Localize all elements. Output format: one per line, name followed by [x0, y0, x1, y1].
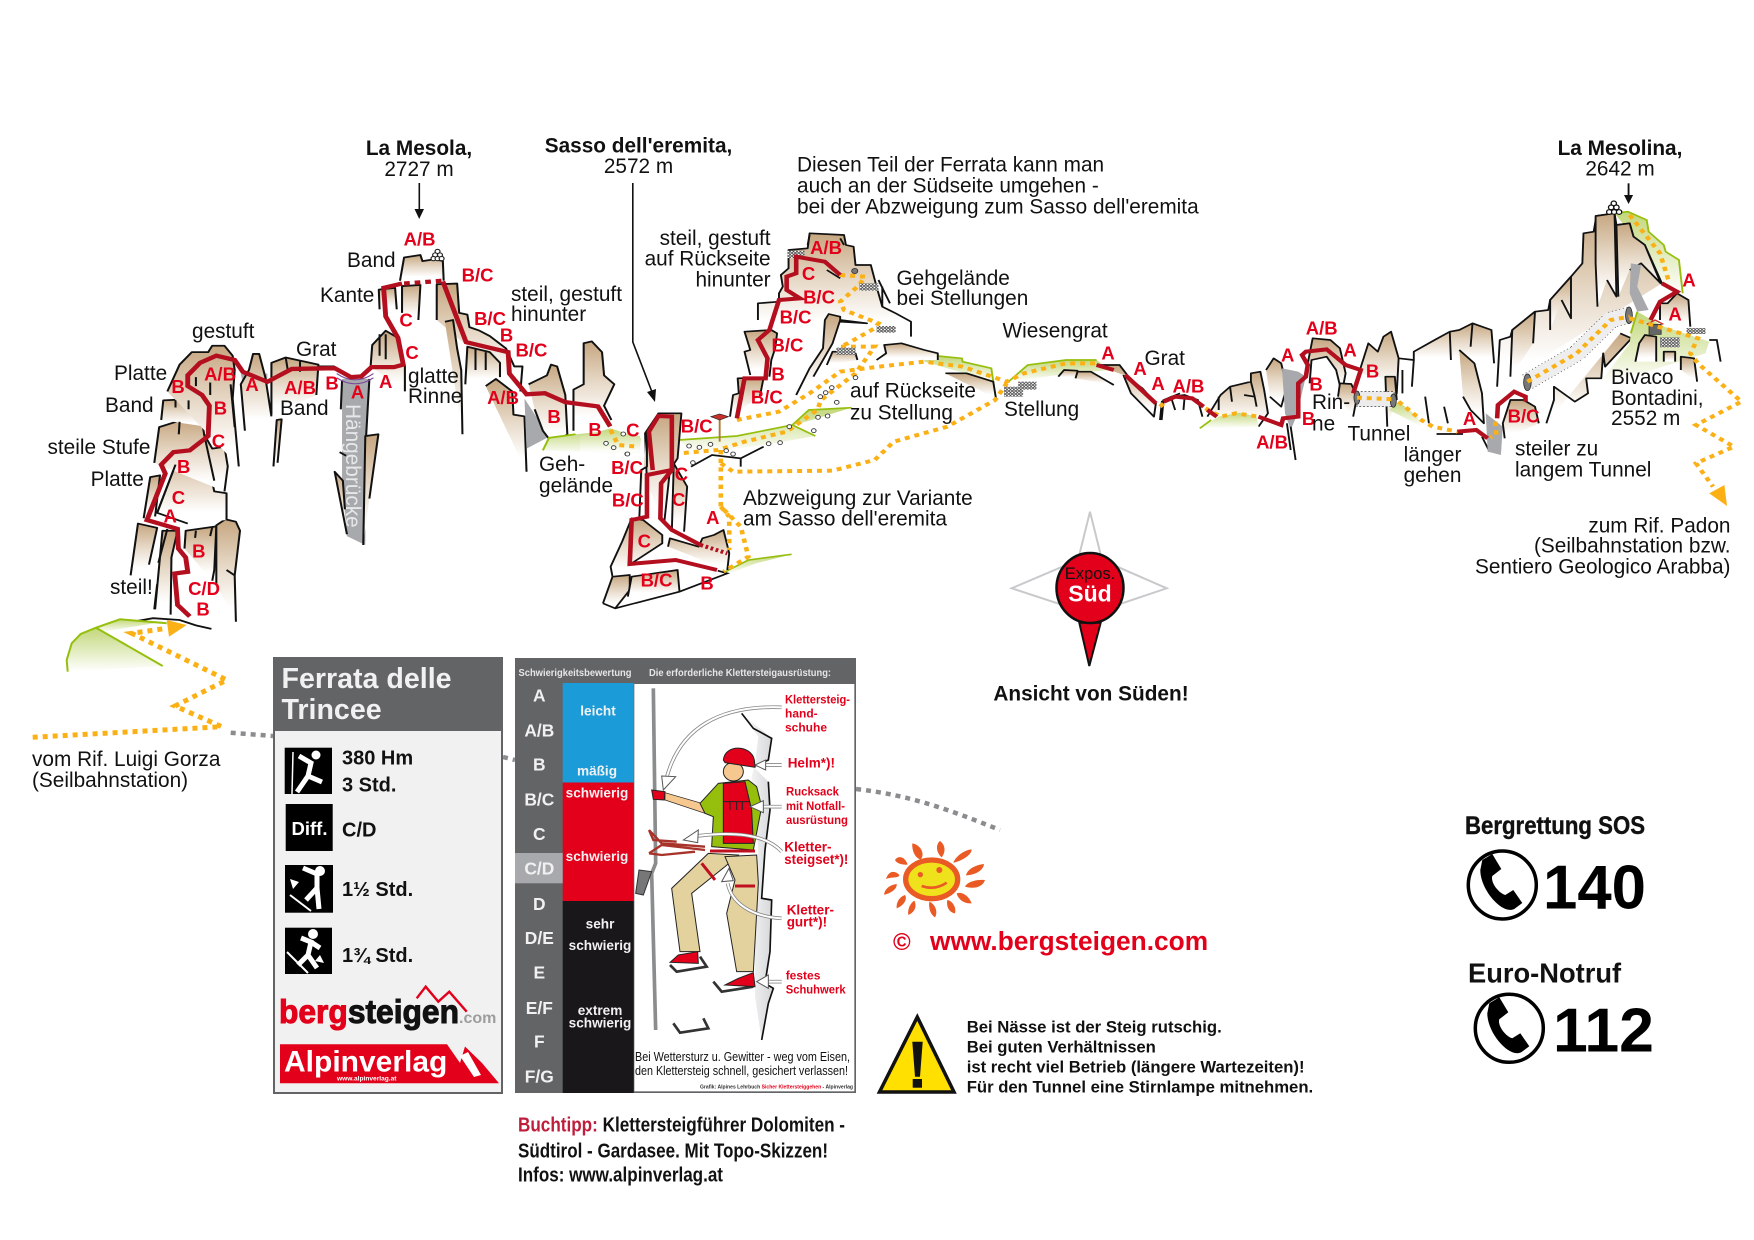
iron cable — [652, 688, 656, 1030]
grade labels along the route: B — [1302, 408, 1315, 429]
summit label: La Mesolina: 2642 m — [1585, 158, 1655, 181]
terrain notes, centre: Stellung — [1004, 398, 1079, 421]
weather warning note: den Klettersteig schnell, gesichert verlassen! — [635, 1064, 848, 1078]
title — [282, 663, 452, 726]
grade labels along the route: C — [672, 489, 685, 510]
grade labels along the route: B/C — [780, 306, 811, 327]
ascent time: 1½ Std. — [342, 879, 413, 901]
grade labels along the route: B — [700, 572, 714, 593]
grade letters: C/D — [524, 858, 554, 878]
descent time: 1¾ Std. — [342, 945, 413, 967]
panel header texts — [518, 668, 831, 679]
height and time — [342, 747, 413, 797]
emergency: Euro-Notruf: Euro-Notruf — [1468, 958, 1622, 989]
grade labels along the route: A — [379, 371, 392, 392]
terrain notes, left: Platte — [91, 468, 144, 491]
grade labels along the route: B/C — [803, 286, 835, 307]
grade labels along the route: A — [351, 382, 364, 403]
terrain notes, centre: auch an der Südseite umgehen - — [797, 175, 1099, 198]
grade letters: D/E — [525, 928, 554, 948]
grade labels along the route: B/C — [641, 570, 672, 591]
summit label: La Mesola: 2727 m — [384, 158, 454, 181]
pointer arrows — [662, 707, 782, 988]
grade labels along the route: B/C — [1508, 406, 1540, 427]
arrowhead to Rif. Padon — [1709, 485, 1727, 506]
grade labels along the route: B — [588, 419, 602, 440]
grade labels along the route: A — [1101, 342, 1115, 363]
grade labels along the route: A/B — [404, 229, 436, 250]
summit label: Sasso dell'eremita: Sasso dell'eremita, — [545, 135, 732, 158]
Sasso tower rocks — [603, 413, 729, 608]
cliff edge — [742, 713, 773, 1040]
equipment labels — [784, 692, 850, 996]
illustration credit: Grafik: Alpines Lehrbuch Sicher Klettersteiggehen - Alpinverlag — [700, 1085, 853, 1091]
tunnel long — [1524, 307, 1632, 391]
grade labels along the route: C — [212, 430, 225, 452]
route dashed summit traverse — [404, 281, 443, 284]
stone markers around bivouac — [1660, 328, 1705, 347]
central section of the topo: Sasso dell'eremita to Wiesengrat — [580, 233, 1180, 608]
terrain notes, left: Kante — [320, 284, 374, 307]
access note: vom Rif. Luigi Gorza — [32, 748, 221, 771]
rock group before scree meadow — [524, 341, 614, 449]
exit note: Sentiero Geologico Arabba) — [1475, 555, 1730, 578]
start meadow and arrival path — [33, 619, 227, 737]
gray gully below tunnel — [1486, 413, 1503, 455]
grade labels along the route: A/B — [1172, 376, 1204, 397]
bar labels: schwierig — [569, 1015, 631, 1030]
rungs — [670, 957, 753, 1033]
equipment labels: Kletter- — [784, 840, 832, 855]
icon: difficulty: Diff. — [292, 818, 327, 839]
terrain notes, right: Bivaco — [1611, 366, 1673, 389]
grade labels along the route: B/C — [474, 308, 506, 329]
grade labels along the route: A/B — [810, 237, 842, 258]
rocks around the bivouac — [1635, 293, 1721, 382]
icon: La Mesolina cairn — [1607, 201, 1622, 214]
cliff — [742, 713, 773, 1040]
La Mesolina massif rocks — [1497, 213, 1662, 438]
bar labels: sehr — [586, 917, 615, 932]
equipment illustration — [634, 684, 854, 1091]
grade labels along the route: B — [177, 456, 190, 477]
terrain notes, right: ne — [1312, 413, 1335, 436]
emergency: Bergrettung: 140 — [1543, 853, 1646, 922]
head and helmet — [723, 762, 743, 781]
website copyright: www.bergsteigen.com — [929, 926, 1208, 956]
icon: sun logo — [884, 841, 985, 917]
topo annotations — [32, 135, 1730, 792]
grade labels along the route: A — [1682, 270, 1696, 291]
grade labels along the route: A — [1151, 373, 1165, 394]
terrain notes, right — [1312, 366, 1704, 487]
ridge rocks between tower and bridge — [241, 354, 335, 466]
lower tower rocks — [131, 519, 240, 622]
terrain notes, left: Band — [105, 394, 154, 417]
grade labels along the route: C — [802, 263, 815, 284]
grade labels along the route: B/C — [681, 416, 713, 437]
access note: (Seilbahnstation) — [32, 769, 188, 792]
exit note — [1475, 514, 1730, 578]
compass exposure marker: Expos. — [1065, 565, 1115, 583]
icon: difficulty — [286, 804, 333, 851]
emergency: Euro-Notruf: 112 — [1553, 997, 1654, 1066]
grade labels along the route: B — [1366, 360, 1379, 381]
terrain notes, centre: bei Stellungen — [896, 287, 1028, 310]
warning text — [967, 1017, 1313, 1096]
grade labels along the route: B — [196, 599, 210, 620]
grade labels along the route: B — [325, 373, 339, 394]
carabiner — [636, 870, 652, 895]
bar labels: mäßig — [577, 764, 617, 779]
equipment labels: festes — [786, 968, 821, 982]
trail dots (yellow) — [611, 275, 1097, 572]
equipment labels: gurt*)! — [787, 915, 827, 930]
warning text: Bei Nässe ist der Steig rutschig. — [967, 1017, 1222, 1036]
highlight C/D grade — [515, 853, 563, 883]
La Mesola summit rocks — [371, 255, 527, 472]
warning text: Für den Tunnel eine Stirnlampe mitnehmen. — [967, 1077, 1313, 1096]
backpack — [723, 782, 753, 843]
grade labels along the route: A — [1343, 340, 1357, 361]
red route: tower loop — [630, 416, 717, 570]
bar labels: schwierig — [569, 938, 631, 953]
terrain notes, left: steil! — [110, 576, 153, 599]
terrain notes, right: 2552 m — [1611, 407, 1680, 430]
ridge rocks — [1200, 323, 1494, 460]
emergency: Bergrettung — [1465, 812, 1646, 922]
book tip: Südtirol - Gardasee. Mit Topo-Skizzen! — [518, 1140, 828, 1162]
terrain notes, left: Geh- — [539, 453, 585, 476]
grade labels along the route: A/B — [487, 387, 519, 408]
red route: Grat segments — [1097, 365, 1156, 403]
grade labels along the route: A/B — [1306, 317, 1338, 338]
panel: route summary — [273, 658, 503, 1093]
equipment labels: ausrüstung — [786, 813, 848, 827]
grade letters: E — [533, 962, 545, 982]
icon: bivouac hut — [1647, 320, 1663, 334]
arrow to La Mesolina — [1624, 183, 1633, 204]
emergency: Bergrettung: Bergrettung SOS — [1465, 812, 1645, 840]
terrain notes, left: Band — [347, 249, 396, 272]
grade labels along the route: C — [399, 309, 413, 330]
icon: phone — [1475, 994, 1543, 1062]
equipment labels: Helm*)! — [788, 755, 835, 770]
logo: bergsteigen.com: .com — [459, 1010, 496, 1027]
terrain notes, left: Platte — [114, 362, 167, 385]
weather warning note: Bei Wettersturz u. Gewitter - weg vom Eisen, — [635, 1050, 850, 1064]
lanyards — [649, 830, 705, 855]
shoes — [670, 952, 755, 987]
equipment labels: schuhe — [785, 721, 827, 735]
terrain notes, centre: auf Rückseite — [645, 248, 771, 271]
grade labels along the route: A — [1133, 358, 1147, 379]
warning text: ist recht viel Betrieb (längere Wartezeiten)! — [967, 1057, 1305, 1076]
compass exposure marker — [1012, 512, 1167, 666]
compass exposure marker: Süd — [1068, 581, 1112, 607]
bar labels: schwierig — [566, 785, 628, 800]
rocks at start — [1160, 395, 1202, 420]
equipment labels: Klettersteig- — [785, 692, 850, 706]
icon: descent — [285, 928, 332, 974]
view note: Ansicht von Süden! — [993, 683, 1189, 706]
grade labels along the route: B — [192, 540, 205, 562]
grade labels along the route: A — [1668, 304, 1682, 325]
grade labels along the route: C — [626, 420, 639, 441]
terrain notes, right: Rin- — [1312, 391, 1350, 414]
terrain notes, left: steile Stufe — [48, 436, 150, 459]
terrain notes, right: länger — [1404, 444, 1461, 467]
red route right section — [1164, 283, 1677, 438]
terrain notes, left — [48, 249, 622, 599]
bridge label: Hängebrücke — [341, 404, 364, 528]
grade labels along the route: A — [164, 506, 177, 526]
start meadow — [96, 619, 163, 632]
terrain notes, left: Rinne — [408, 385, 462, 408]
right section of the topo: Grat to La Mesolina — [1160, 183, 1741, 506]
grade labels along the route: A/B — [204, 364, 236, 385]
La Mesolina summit grass — [1615, 212, 1683, 293]
height and time: 380 Hm — [342, 747, 413, 769]
grade labels along the route: A/B — [284, 377, 316, 398]
grade labels along the route: B — [214, 398, 227, 419]
icon: warning triangle — [880, 1017, 954, 1092]
grade letters: F — [534, 1032, 545, 1052]
grade labels along the route: A — [1281, 345, 1294, 366]
icon: phone — [1468, 851, 1536, 919]
terrain notes, centre: Diesen Teil der Ferrata kann man — [797, 154, 1104, 177]
grade letters: B — [533, 755, 546, 775]
route dashed tower end — [701, 545, 727, 553]
grade labels along the route: C — [675, 464, 688, 485]
terrain notes, centre: zu Stellung — [850, 401, 953, 424]
exit note: (Seilbahnstation bzw. — [1534, 535, 1730, 558]
emergency: Euro-Notruf — [1468, 958, 1654, 1066]
trail dots to first scree — [610, 430, 640, 447]
height and time: 3 Std. — [342, 775, 396, 797]
terrain notes, centre: Wiesengrat — [1002, 320, 1108, 343]
summit label: La Mesola: La Mesola, — [366, 137, 472, 160]
title: Trincee — [282, 694, 382, 726]
suspension bridge gully — [335, 374, 378, 545]
meadow left of tower — [580, 428, 641, 452]
exit note: zum Rif. Padon — [1588, 514, 1730, 537]
harness — [702, 851, 755, 886]
terrain notes, left: glatte — [408, 365, 459, 388]
terrain notes, centre: hinunter — [695, 269, 771, 292]
weather warning note — [635, 1050, 850, 1078]
panel: difficulty scale and equipment — [515, 658, 856, 1093]
gray dotted connector behind panels — [231, 733, 1000, 830]
mid grass slope — [679, 408, 852, 453]
red route: upper peak — [737, 257, 840, 418]
difficulty colour bars — [563, 683, 634, 1093]
book tip — [518, 1115, 845, 1187]
grade labels along the route: A — [245, 374, 259, 395]
bar labels: extrem — [578, 1003, 622, 1018]
terrain notes, centre: Abzweigung zur Variante — [743, 487, 973, 510]
access note — [32, 748, 221, 792]
terrain notes, centre: am Sasso dell'eremita — [743, 508, 947, 531]
terrain notes, right: langem Tunnel — [1515, 459, 1651, 482]
logo: Alpinverlag: Alpinverlag — [284, 1046, 447, 1079]
grade labels along the route: B — [771, 364, 785, 385]
terrain notes, right: steiler zu — [1515, 438, 1598, 461]
book tip: Buchtipp: Klettersteigführer Dolomiten - — [518, 1115, 845, 1137]
arrow line to Sasso dell'eremita — [633, 183, 656, 402]
equipment labels: Rucksack — [786, 785, 839, 799]
grade letters: A — [533, 686, 546, 706]
logo: Alpinverlag: www.alpinverlag.at — [336, 1076, 397, 1082]
grade labels along the route: B/C — [462, 264, 494, 285]
grade labels along the route: A — [1463, 408, 1476, 429]
website copyright: © — [893, 929, 911, 956]
arrow to La Mesola — [414, 183, 424, 219]
grass exit slope — [725, 554, 792, 574]
scree meadow — [543, 431, 640, 454]
panel header texts: Die erforderliche Klettersteigausrüstung: — [649, 668, 831, 679]
left section of the topo: Ferrata start to Sasso approach — [96, 249, 640, 632]
equipment labels: Schuhwerk — [786, 982, 846, 996]
stones on scree — [604, 432, 629, 456]
upper peak rocks — [730, 233, 911, 417]
tunnel short — [1354, 391, 1396, 407]
grade letters: D — [533, 894, 546, 914]
terrain notes, left: gelände — [539, 474, 613, 498]
equipment labels: Kletter- — [787, 902, 834, 917]
yellow trail dots — [1160, 215, 1741, 487]
grade letters: C — [533, 824, 546, 844]
grade labels along the route — [164, 229, 1696, 620]
arm — [665, 793, 705, 813]
bar labels — [566, 704, 631, 1030]
grade labels along the route: B — [500, 324, 513, 345]
Bivacco meadow — [1599, 312, 1709, 383]
terrain notes, centre: auf Rückseite — [850, 380, 976, 403]
summit label: La Mesolina: La Mesolina, — [1558, 137, 1682, 160]
summit label: Sasso dell'eremita — [545, 135, 732, 178]
terrain notes, right: Bontadini, — [1611, 387, 1704, 410]
grade letters: E/F — [526, 998, 553, 1018]
terrain notes, centre: Gehgelände — [896, 267, 1010, 290]
terrain notes, centre: steil, gestuft — [660, 227, 771, 250]
terrain notes, right: Tunnel — [1348, 423, 1410, 446]
grade labels along the route: C — [405, 342, 419, 363]
title: Ferrata delle — [282, 663, 452, 695]
terrain notes, centre — [645, 154, 1199, 531]
grade labels along the route: C/D — [188, 578, 220, 599]
terrain notes, left: Grat — [296, 338, 337, 361]
grade labels along the route: B/C — [612, 490, 644, 511]
logo: Alpinverlag — [280, 1044, 499, 1083]
bar labels: leicht — [580, 704, 616, 719]
glove — [652, 790, 665, 800]
grade labels along the route: B — [1309, 374, 1323, 395]
terrain notes, right: gehen — [1404, 464, 1461, 487]
book tip: Infos: www.alpinverlag.at — [518, 1165, 723, 1187]
start meadow rocks — [133, 618, 211, 629]
stones and position markers — [604, 251, 1037, 465]
route descent from La Mesola — [443, 281, 610, 426]
grade labels along the route: B/C — [751, 386, 783, 407]
warning text: Bei guten Verhältnissen — [967, 1037, 1156, 1056]
icon: summit cairn — [431, 249, 444, 261]
summit label: La Mesolina — [1558, 137, 1682, 181]
summit label: La Mesola — [366, 137, 472, 181]
shirt — [700, 780, 762, 850]
grade letters — [524, 686, 555, 1086]
panel header texts: Schwierigkeitsbewertung — [518, 668, 632, 679]
grade letters: A/B — [524, 721, 554, 741]
terrain notes, left: steil, gestuft — [511, 283, 622, 306]
icon: ascent — [285, 865, 333, 913]
terrain notes, left: gestuft — [192, 320, 255, 343]
difficulty value: C/D — [342, 820, 376, 842]
terrain notes, centre: Grat — [1144, 347, 1185, 370]
terrain notes, left: Band — [280, 397, 329, 420]
grade labels along the route: C — [172, 487, 185, 508]
equipment labels: steigset*)! — [784, 852, 848, 867]
middle tower rocks — [144, 346, 239, 524]
legs — [672, 853, 738, 952]
grade labels along the route: B — [547, 406, 561, 427]
grade labels along the route: A — [706, 507, 719, 528]
logo: bergsteigen.com: bergsteigen — [279, 993, 459, 1030]
grade labels along the route: B — [171, 376, 185, 397]
ridge rocks to Wiesengrat — [691, 343, 1180, 467]
grade letters: F/G — [525, 1066, 554, 1086]
bar labels: schwierig — [566, 849, 628, 864]
icon: signpost — [711, 414, 728, 442]
terrain notes, left: hinunter — [511, 303, 586, 326]
equipment labels: mit Notfall- — [786, 799, 845, 813]
panel header — [273, 658, 503, 731]
grade labels along the route: B/C — [611, 457, 643, 478]
summit label: Sasso dell'eremita: 2572 m — [604, 155, 673, 178]
grade labels along the route: A/B — [1256, 431, 1288, 452]
suspension bridge purple span and red route — [147, 284, 403, 616]
equipment labels: hand- — [785, 706, 818, 720]
grade labels along the route: C — [638, 530, 651, 551]
terrain notes, centre: bei der Abzweigung zum Sasso dell'eremita — [797, 195, 1199, 218]
grade letters: B/C — [524, 790, 555, 810]
grade labels along the route: B/C — [515, 339, 547, 360]
icon: climber — [285, 748, 332, 794]
grade labels along the route: B/C — [771, 335, 803, 356]
